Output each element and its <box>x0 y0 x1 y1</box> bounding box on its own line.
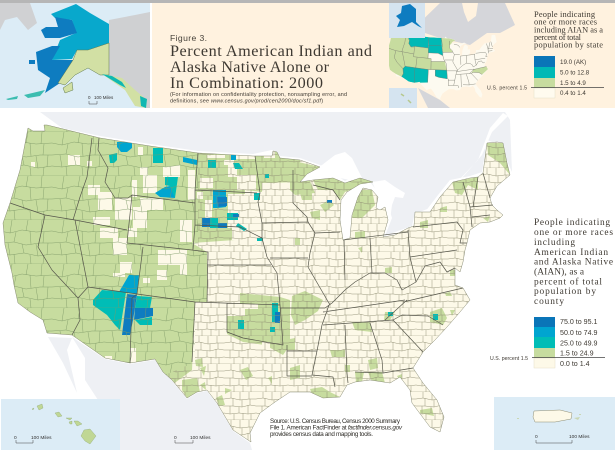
thumbnail teal states <box>402 34 447 83</box>
title note: (For information on confidentiality protection, nonsampling error, and <box>170 92 347 98</box>
county legend heading: including <box>534 238 575 248</box>
county legend heading: percent of total <box>534 276 602 288</box>
thumbnail Hudson Bay <box>462 3 478 22</box>
county legend labels: 0.0 to 1.4 <box>560 360 590 368</box>
state legend heading: one or more races <box>534 18 597 26</box>
Mississippi and Alabama scattered <box>330 322 402 384</box>
thumbnail land cream <box>396 35 496 100</box>
Mexico <box>48 337 252 450</box>
Wisconsin and Iowa scattered <box>295 200 334 245</box>
Trans-Pecos green <box>182 378 200 398</box>
state legend labels <box>560 59 590 97</box>
Alaska southcentral boroughs <box>58 43 109 93</box>
dark blue counties <box>122 197 332 335</box>
thumbnail Canada <box>425 3 515 45</box>
county lines west <box>4 130 207 374</box>
county lines east <box>168 142 510 440</box>
state legend labels: 0.4 to 1.4 <box>560 90 586 97</box>
title: Alaska Native Alone or <box>170 58 330 76</box>
scale bar main map: 0 <box>174 435 177 441</box>
green county area <box>0 100 510 416</box>
county boundary lines <box>4 130 510 440</box>
Kansas band and Oklahoma <box>227 293 290 355</box>
Tennessee spot <box>384 312 395 320</box>
county legend heading <box>534 218 613 307</box>
thumbnail US <box>389 35 496 100</box>
teal counties <box>93 148 438 332</box>
title note: definitions, see www.census.gov/prod/cen2000/doc/sf1.pdf) <box>170 98 323 104</box>
state legend labels: 19.0 (AK) <box>560 59 586 66</box>
header panel <box>152 3 615 108</box>
thumbnail green states <box>389 36 488 83</box>
Lake Huron <box>372 180 405 222</box>
state legend heading: population by state <box>534 40 603 50</box>
Texas scattered counties <box>195 358 272 406</box>
Puerto Rico island <box>533 410 572 422</box>
land base <box>3 125 510 442</box>
St Lawrence <box>458 113 508 181</box>
county legend heading: and Alaska Native <box>534 258 613 268</box>
title block: Figure 3. <box>170 33 207 43</box>
Louisiana coast <box>310 387 340 398</box>
panel: Hawaii inset <box>1 399 120 450</box>
county legend labels: 75.0 to 95.1 <box>560 318 598 326</box>
state legend heading: percent of total <box>534 33 582 42</box>
scale bar Alaska: 100 Miles <box>94 95 114 100</box>
county colour areas <box>0 100 510 416</box>
Ohio and Virginia scattered <box>358 247 456 276</box>
Minnesota Wisconsin north <box>290 160 320 200</box>
county legend heading: American Indian <box>534 248 608 258</box>
main map <box>0 100 520 450</box>
county legend US line <box>532 356 605 358</box>
county legend heading: county <box>534 297 564 307</box>
title <box>170 42 372 92</box>
title block <box>170 33 372 104</box>
state legend heading: including AIAN as a <box>534 26 603 34</box>
white county patches in the west <box>31 147 275 362</box>
panel: Alaska inset <box>0 3 150 108</box>
title note <box>170 92 347 104</box>
Hawaii scale: 0 <box>14 435 17 441</box>
state legend <box>487 10 604 98</box>
state legend US line <box>531 86 604 88</box>
Alaska panhandle <box>102 74 147 108</box>
source note: File 1. American FactFinder at factfinder.census.gov <box>270 424 403 432</box>
Florida spot <box>420 408 434 416</box>
scale bar main map <box>174 435 211 443</box>
Aleutian islands <box>6 90 45 100</box>
source note: Source: U.S. Census Bureau, Census 2000 Summary <box>270 418 401 425</box>
Hawaii scale: 100 Miles <box>31 435 52 441</box>
Rhode Island and MA spot <box>483 216 490 222</box>
thumbnail Hawaii inset <box>389 88 417 108</box>
Puerto Rico scale: 100 Miles <box>569 434 590 440</box>
Upper Michigan <box>313 178 373 200</box>
state legend labels: 1.5 to 4.9 <box>560 80 586 87</box>
county legend US label: U.S. percent 1.5 <box>490 356 528 362</box>
county legend labels: 25.0 to 49.9 <box>560 340 598 348</box>
Lower Michigan <box>352 190 375 238</box>
Russia landmass <box>0 3 37 30</box>
Alaska west census areas <box>29 17 77 93</box>
state legend swatches <box>534 56 555 98</box>
Lake Ontario <box>414 207 440 214</box>
Hawaiian islands <box>32 404 96 444</box>
land outline <box>3 125 510 442</box>
Canada <box>40 112 512 236</box>
Puerto Rico scale: 0 <box>535 434 538 440</box>
title: Percent American Indian and <box>170 42 372 60</box>
scale bar Alaska <box>88 95 114 104</box>
North Carolina Lumbee area <box>430 292 455 325</box>
county legend labels: 50.0 to 74.9 <box>560 329 598 337</box>
Canada landmass <box>109 12 150 108</box>
American Indian county blocks <box>93 142 438 335</box>
state legend labels: 5.0 to 12.8 <box>560 70 590 76</box>
source note <box>270 418 403 438</box>
Alaska north boroughs <box>51 4 109 60</box>
light blue counties <box>117 142 236 294</box>
title: In Combination: 2000 <box>170 74 323 92</box>
thumbnail map: states <box>386 3 515 108</box>
Hawaii scale <box>14 435 52 443</box>
state legend US label: U.S. percent 1.5 <box>487 86 527 92</box>
scale bar Alaska: 0 <box>88 95 91 100</box>
county legend heading: (AIAN), as a <box>534 266 585 278</box>
thumbnail Alaska inset <box>389 3 425 38</box>
Puerto Rico scale <box>535 434 590 443</box>
county legend labels: 1.5 to 24.9 <box>560 350 594 358</box>
panhandle teal boroughs <box>102 74 147 108</box>
thumbnail Mexico <box>418 88 450 108</box>
New York north and Vermont <box>420 177 478 228</box>
Lake Superior <box>307 152 362 180</box>
county legend heading: one or more races <box>534 228 613 238</box>
scale bar main map: 100 Miles <box>190 435 211 441</box>
county legend heading: population by <box>534 287 596 297</box>
small islands <box>517 414 581 420</box>
county legend heading: People indicating <box>534 218 610 228</box>
state legend heading <box>534 10 603 50</box>
panel: Puerto Rico inset <box>494 397 615 450</box>
state boundaries <box>10 138 493 387</box>
Maine north <box>487 143 510 175</box>
county legend <box>490 218 613 368</box>
state legend heading: People indicating <box>534 10 596 19</box>
county legend swatches <box>534 317 555 368</box>
source note: provides census data and mapping tools. <box>270 431 373 438</box>
Arkansas and Missouri scattered <box>285 291 323 380</box>
top grey strip <box>0 0 615 3</box>
county legend labels <box>560 318 598 368</box>
